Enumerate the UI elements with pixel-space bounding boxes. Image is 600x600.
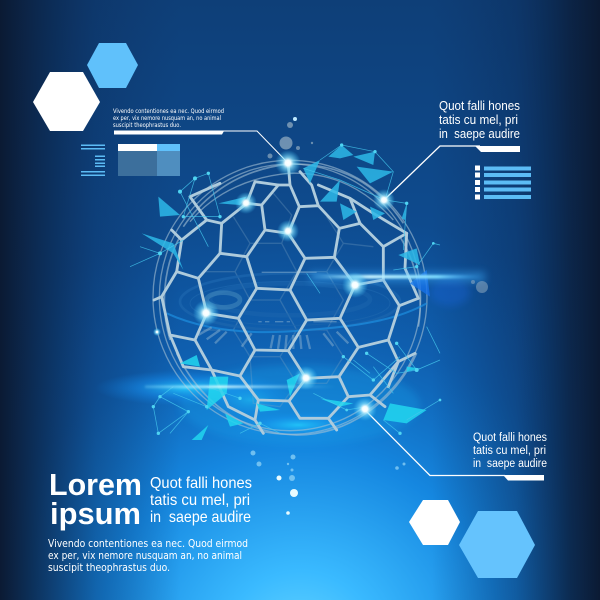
text block: top left note: [113, 108, 224, 129]
heading: bottom right callout: [473, 432, 547, 470]
back mesh: [203, 193, 373, 407]
heading: bottom right callout: Quot falli hones: [473, 432, 547, 444]
network: polygons and lines around the sphere: [130, 143, 441, 440]
icon: list lines left: [81, 144, 105, 176]
text block: top left note: suscipit theophrastus duo.: [113, 122, 181, 129]
subheading: tatis cu mel, pri: [150, 492, 250, 509]
connector: top right: [384, 146, 520, 200]
title: ipsum: [50, 496, 141, 531]
hexagon: white top left: [33, 72, 100, 131]
network fills: upper: [142, 145, 420, 270]
text block: bottom description: [48, 538, 248, 574]
connector: bottom right: [365, 410, 544, 480]
hexagon: blue bottom right: [459, 511, 535, 578]
network fills: deep blue: [410, 270, 430, 297]
glow: right streak: [310, 272, 485, 306]
text block: top left note: ex per, vix nemore nusquam an, no animal: [113, 115, 221, 122]
network fills: lower: [180, 355, 427, 440]
HUD rings: [167, 273, 427, 332]
particles: above sphere: [268, 117, 488, 293]
hexagon: white bottom right: [409, 500, 460, 545]
subheading: in saepe audire: [150, 509, 251, 526]
text block: top left note: Vivendo contentiones ea nec. Quod eirmod: [113, 108, 224, 115]
icon: list top right: [475, 166, 531, 200]
heading: top right callout: [439, 99, 520, 141]
hexagon: blue top left: [87, 43, 138, 88]
heading: bottom right callout: in saepe audire: [473, 458, 547, 470]
glow: lower sphere aura: [95, 365, 420, 445]
subheading: [150, 475, 252, 526]
glowing nodes: [153, 150, 395, 421]
heading: bottom right callout: tatis cu mel, pri: [473, 445, 546, 457]
connector: top left: [114, 131, 288, 163]
text block: bottom description: Vivendo contentiones ea nec. Quod eirmod: [48, 538, 248, 550]
heading: top right callout: Quot falli hones: [439, 99, 520, 113]
sphere: outer rings, back mesh and HUD: [130, 143, 441, 440]
glow: lower streak: [145, 386, 335, 388]
title: [49, 467, 142, 531]
title: Lorem: [49, 467, 142, 502]
network nodes: [152, 143, 441, 435]
text block: bottom description: ex per, vix nemore nusquam an, no animal: [48, 550, 242, 562]
heading: top right callout: tatis cu mel, pri: [439, 113, 518, 127]
subheading: Quot falli hones: [150, 475, 252, 492]
main hex mesh: [154, 165, 418, 433]
outer rings: [153, 160, 427, 435]
network lines: [130, 145, 440, 433]
HUD ticks: [198, 272, 348, 349]
text block: bottom description: suscipit theophrastus duo.: [48, 562, 170, 574]
chart: block table: [118, 144, 180, 176]
heading: top right callout: in saepe audire: [439, 127, 520, 141]
particles: below sphere: [250, 450, 406, 515]
